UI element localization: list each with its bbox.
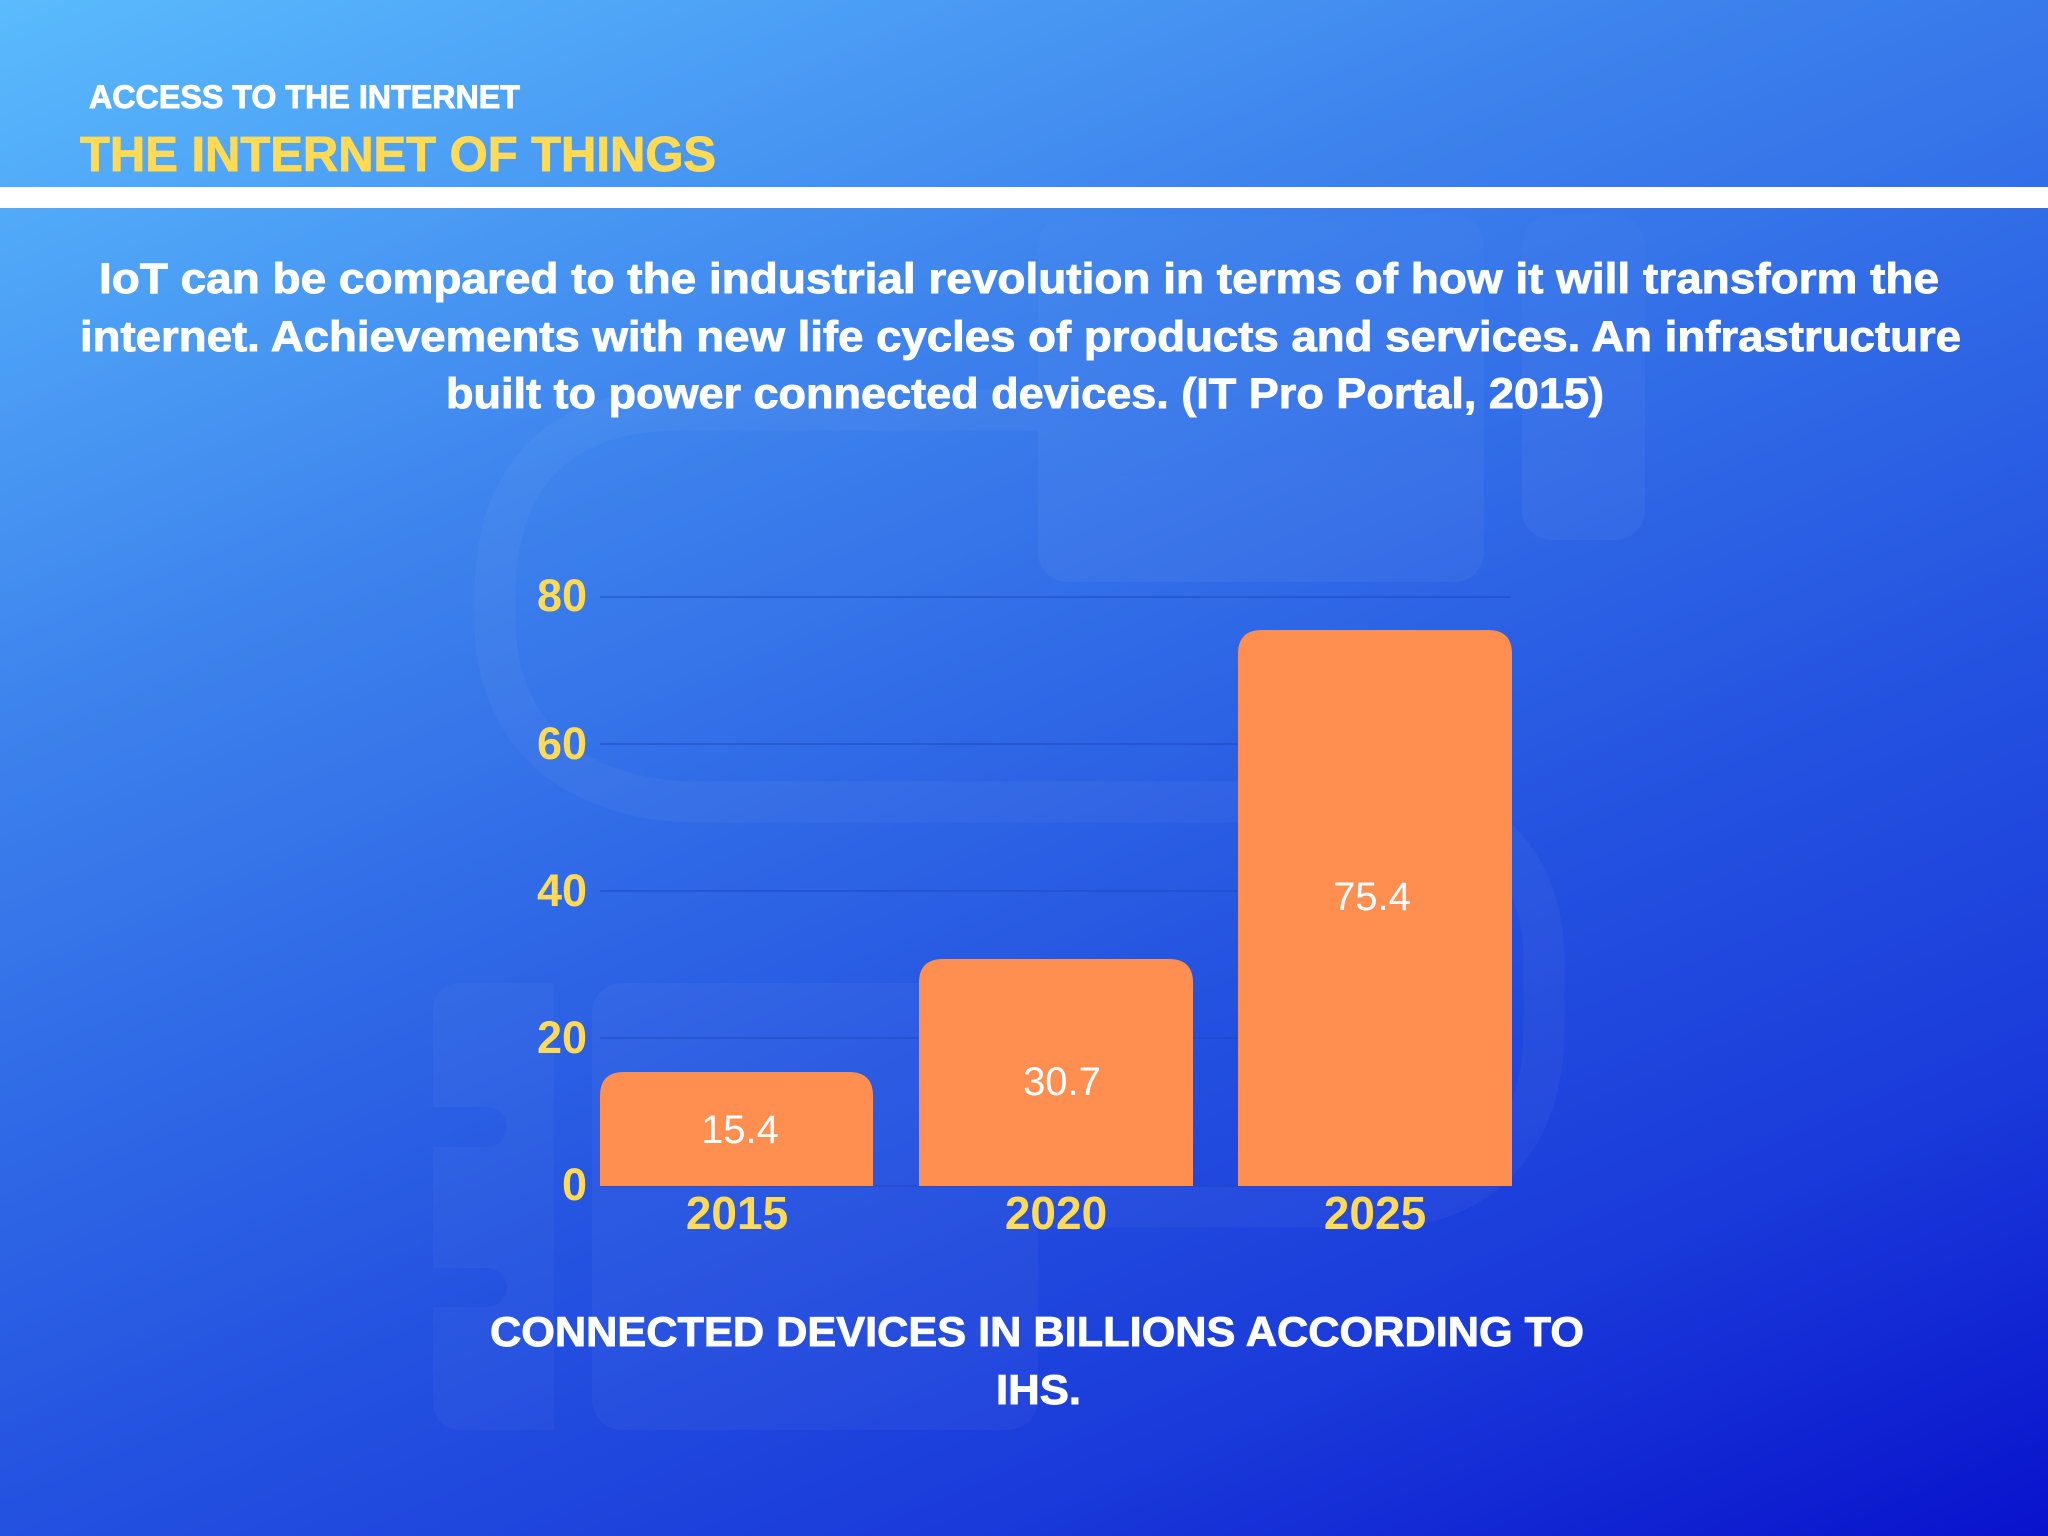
watermark: lower plug block (592, 983, 1038, 1430)
header: title: THE INTERNET OF THINGS (80, 128, 716, 182)
chart gridlines (600, 597, 1511, 1186)
watermark: plug icon (433, 215, 1645, 1430)
bar chart: connected devices (537, 570, 1512, 1239)
watermark: upper plug prongs (1522, 215, 1645, 540)
bar value labels: 15.4 (701, 1108, 779, 1152)
chart caption: IHS. (996, 1366, 1081, 1413)
y axis labels: 80 (537, 570, 587, 621)
watermark: lower plug prongs (433, 983, 554, 1430)
watermark: cable (495, 410, 1544, 1207)
y axis labels: 40 (537, 865, 587, 916)
header: section label: ACCESS TO THE INTERNET (89, 79, 520, 115)
white header divider bar (0, 187, 2048, 208)
x axis labels: 2025 (1324, 1187, 1426, 1239)
bar: 2015 (600, 1072, 873, 1186)
y axis labels (537, 570, 587, 1210)
intro paragraph: internet. Achievements with new life cycles of products and services. An infrastructure (80, 313, 1961, 361)
y axis labels: 20 (537, 1012, 587, 1063)
bar: 2025 (1238, 630, 1512, 1186)
bar value labels: 30.7 (1023, 1060, 1101, 1104)
x axis labels (686, 1187, 1426, 1239)
x axis labels: 2015 (686, 1187, 788, 1239)
bar value labels (701, 875, 1411, 1152)
intro paragraph (80, 255, 1961, 418)
intro paragraph: built to power connected devices. (IT Pro Portal, 2015) (446, 370, 1604, 418)
watermark: upper plug block (1038, 215, 1484, 582)
x axis labels: 2020 (1005, 1187, 1107, 1239)
y axis labels: 60 (537, 718, 587, 769)
chart caption: CONNECTED DEVICES IN BILLIONS ACCORDING TO (490, 1308, 1584, 1355)
intro paragraph: IoT can be compared to the industrial revolution in terms of how it will transform the (99, 255, 1939, 303)
y axis labels: 0 (562, 1159, 587, 1210)
bar value labels: 75.4 (1333, 875, 1411, 919)
bar: 2020 (919, 959, 1193, 1186)
chart caption (490, 1308, 1584, 1413)
